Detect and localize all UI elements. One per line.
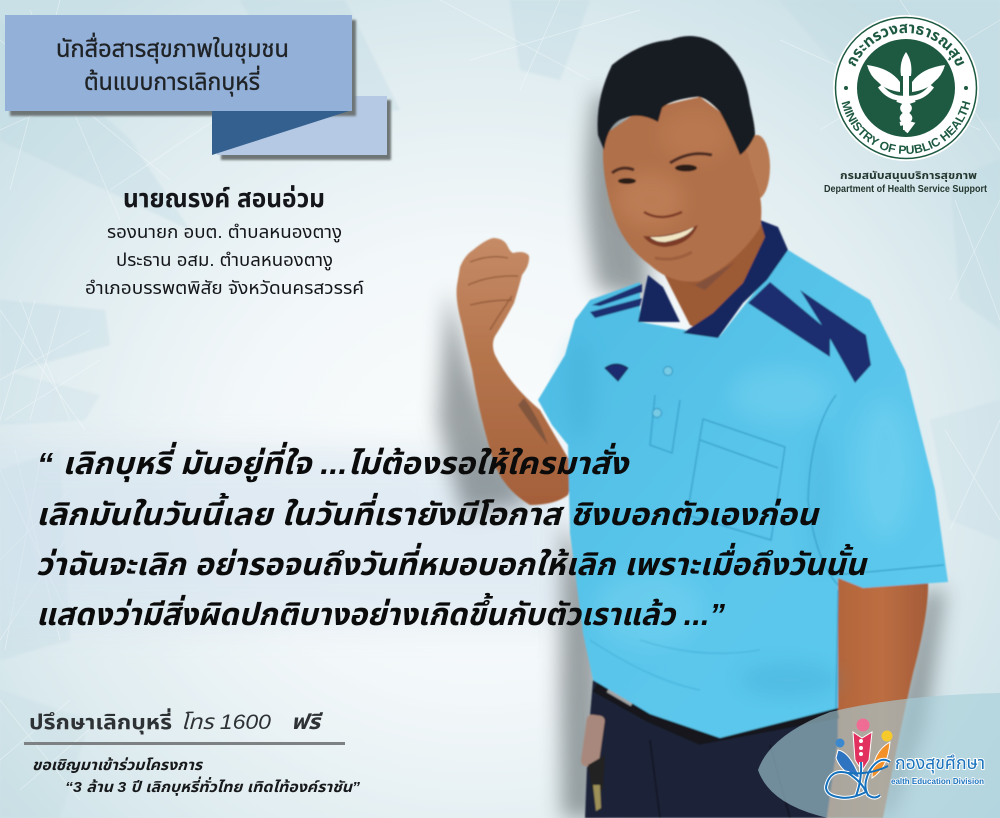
hair [598, 36, 755, 155]
campaign invitation [32, 757, 361, 796]
quote [36, 441, 868, 632]
neck [662, 222, 768, 337]
health education division logo: กองสุขศึกษา [895, 753, 985, 774]
profile name and position: รองนายก อบต. ตำบลหนองตางู [107, 222, 342, 244]
right arm [825, 575, 928, 818]
title text: ต้นแบบการเลิกบุหรี่ [84, 65, 260, 97]
profile name and position: อำเภอบรรพตพิสัย จังหวัดนครสวรรค์ [85, 278, 364, 298]
ministry logo [824, 15, 988, 195]
ministry logo: MINISTRY OF PUBLIC HEALTH [842, 100, 970, 154]
health education division logo [826, 718, 985, 798]
quote: ว่าฉันจะเลิก อย่ารอจนถึงวันที่หมอบอกให้เลิก เพราะเมื่อถึงวันนั้น [36, 542, 868, 582]
campaign invitation: “3 ล้าน 3 ปี เลิกบุหรี่ทั่วไทย เทิดไท้องค์ราชัน” [65, 776, 361, 796]
face [603, 97, 761, 282]
hotline divider [24, 742, 345, 745]
quote: “ เลิกบุหรี่ มันอยู่ที่ใจ ...ไม่ต้องรอให้ใครมาสั่ง [37, 441, 630, 483]
person photo illustration [457, 36, 948, 818]
title text [56, 32, 289, 97]
bottom right translucent panel [758, 693, 1000, 818]
quit line hotline: โทร 1600 [181, 711, 271, 734]
title text: นักสื่อสารสุขภาพในชุมชน [56, 32, 289, 64]
title banner [5, 15, 391, 160]
polo shirt [538, 220, 948, 738]
raised arm and fist [457, 238, 575, 505]
quit line hotline [29, 708, 324, 734]
profile name and position [85, 183, 364, 298]
profile name and position: นายณรงค์ สอนอ่วม [123, 183, 325, 213]
department name: กรมสนับสนุนบริการสุขภาพ [840, 170, 977, 182]
quote: เลิกมันในวันนี้เลย ในวันที่เรายังมีโอกาส ชิงบอกตัวเองก่อน [36, 492, 820, 532]
quote: แสดงว่ามีสิ่งผิดปกติบางอย่างเกิดขึ้นกับตัวเราแล้ว ...” [36, 592, 725, 632]
quit line hotline: ฟรี [291, 711, 324, 734]
department name: Department of Health Service Support [824, 184, 988, 195]
department name [824, 170, 988, 195]
navy collar [638, 220, 788, 338]
profile name and position: ประธาน อสม. ตำบลหนองตางู [116, 250, 333, 272]
trousers and belt [580, 680, 838, 818]
campaign invitation: ขอเชิญมาเข้าร่วมโครงการ [32, 757, 203, 774]
caduceus emblem [867, 52, 945, 132]
ear [744, 135, 770, 199]
shadow behind person [438, 90, 945, 818]
ministry logo: กระทรวงสาธารณสุข [848, 24, 964, 67]
health education division logo: ealth Education Division [891, 776, 984, 786]
quit line hotline: ปรึกษาเลิกบุหรี่ [29, 708, 172, 734]
shirt logo [605, 364, 628, 381]
navy shoulder stripes [590, 282, 871, 383]
